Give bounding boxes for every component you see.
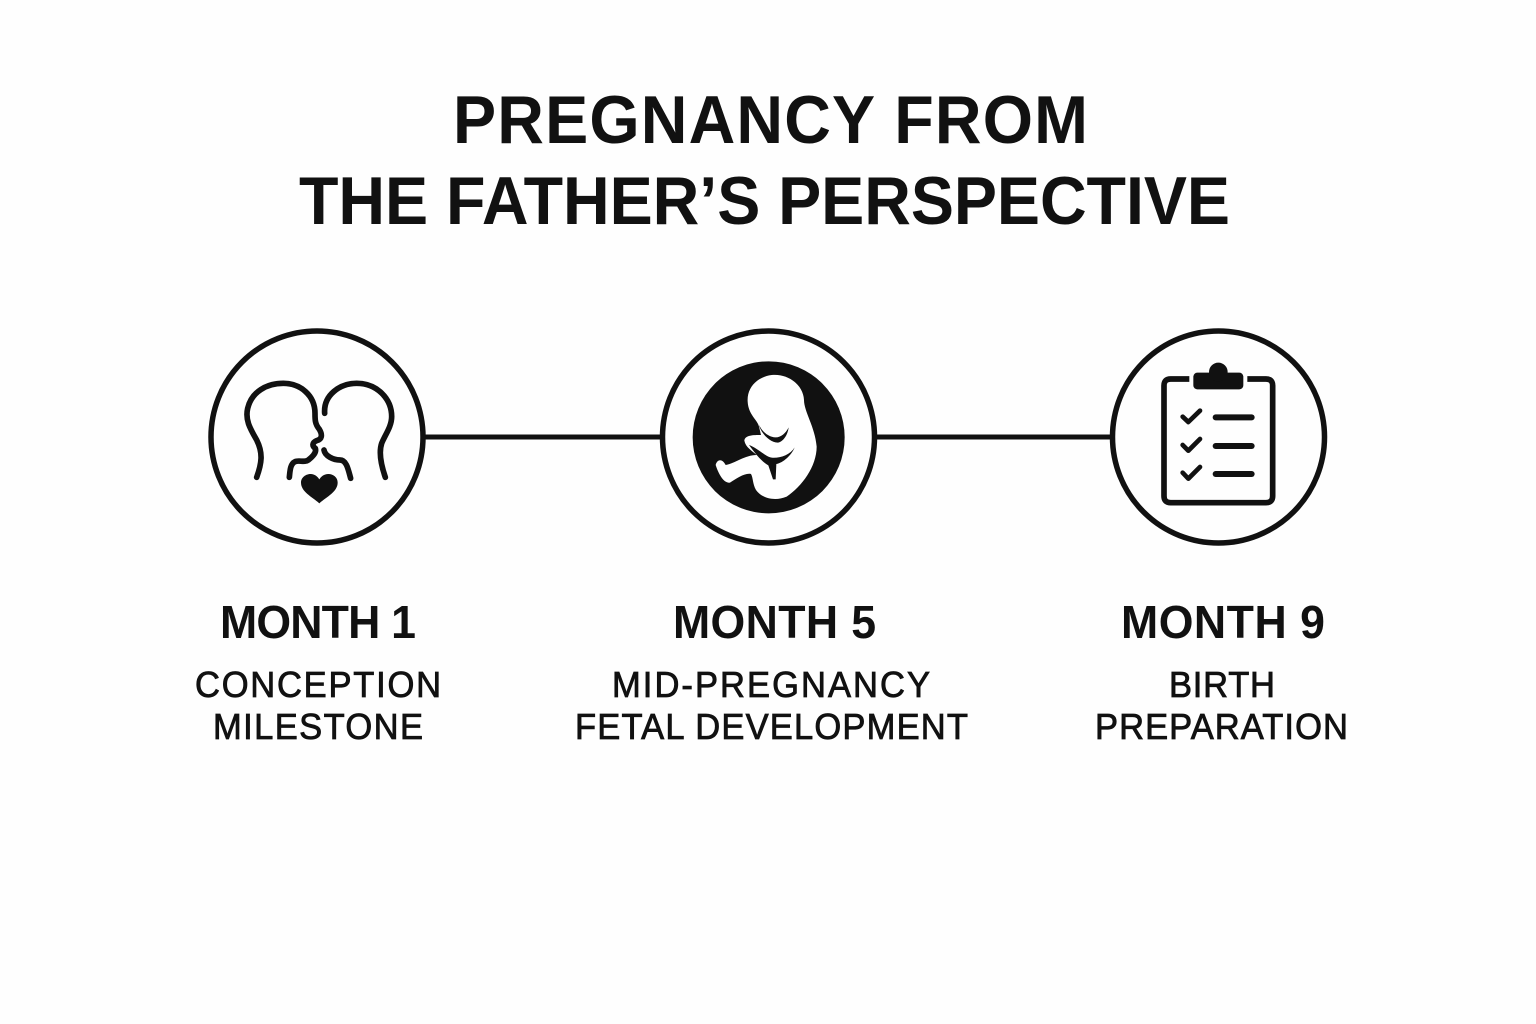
timeline connector: month 1 to month 5 <box>424 434 662 440</box>
title <box>299 83 1230 239</box>
title: THE FATHER’S PERSPECTIVE <box>299 164 1230 239</box>
label: month 9 <box>1095 596 1348 747</box>
icon: checklist clipboard <box>1112 331 1324 543</box>
icon: fetus in dark disc <box>662 331 874 543</box>
label: month 9: PREPARATION <box>1095 707 1348 747</box>
label: month 9: BIRTH <box>1169 665 1275 705</box>
label: month 1: CONCEPTION <box>195 665 441 705</box>
label: month 1 <box>195 596 441 747</box>
label: month 1: MONTH 1 <box>220 596 416 648</box>
label: month 5: MONTH 5 <box>673 596 876 648</box>
label: month 5: FETAL DEVELOPMENT <box>575 707 968 747</box>
icon: couple with heart <box>211 331 423 543</box>
title: PREGNANCY FROM <box>453 83 1088 158</box>
label: month 5: MID-PREGNANCY <box>612 665 930 705</box>
label: month 5 <box>575 596 968 747</box>
label: month 9: MONTH 9 <box>1121 596 1325 648</box>
label: month 1: MILESTONE <box>213 707 423 747</box>
timeline connector: month 5 to month 9 <box>876 434 1112 440</box>
